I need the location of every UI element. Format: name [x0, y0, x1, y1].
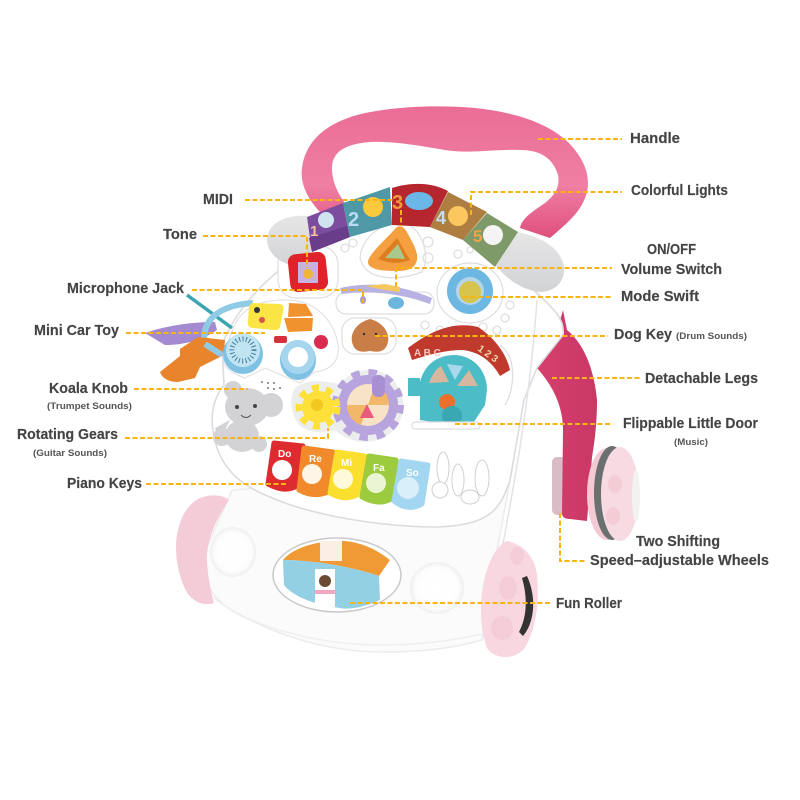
ABC 123 sign — [408, 325, 510, 376]
leader: colorful lights — [471, 192, 622, 215]
rear wheel inner rim — [552, 457, 566, 515]
orange key — [160, 337, 225, 382]
light 4: 4 — [436, 208, 446, 228]
leader: on/off — [396, 268, 612, 287]
light 2: 2 — [348, 209, 359, 231]
label: Mini Car Toy: Mini Car Toy — [34, 323, 119, 339]
leader: MIDI drop — [400, 210, 402, 226]
ABC 123 sign: 1 2 3 — [475, 343, 500, 365]
light 5: 5 — [473, 227, 482, 246]
yellow face — [248, 303, 284, 330]
dog key — [342, 318, 396, 354]
note: Drum Sounds: (Drum Sounds) — [676, 331, 747, 342]
leader: handle — [538, 138, 622, 140]
left front wheel — [176, 495, 229, 604]
key Do: Do — [278, 449, 291, 460]
label: Volume Switch: Volume Switch — [621, 262, 722, 278]
light 1: 1 — [310, 223, 318, 240]
teal stick — [187, 295, 232, 328]
tone button — [287, 251, 329, 293]
right grey handle end — [496, 232, 564, 292]
leader: detachable legs — [552, 377, 640, 379]
leader: MIDI — [245, 199, 395, 201]
housing: notes — [341, 237, 514, 405]
label: Piano Keys: Piano Keys — [67, 476, 142, 492]
base — [204, 470, 512, 652]
right front wheel — [481, 541, 538, 657]
key Do — [268, 443, 303, 489]
lavender key — [145, 322, 217, 345]
label: MIDI: MIDI — [203, 192, 233, 208]
leader: piano keys — [146, 483, 287, 485]
flippable little door — [408, 355, 487, 429]
rabbits decoration — [432, 452, 489, 504]
orange buttons — [288, 303, 313, 317]
handle — [302, 106, 588, 238]
light 5 — [463, 213, 518, 267]
base lower rim — [213, 597, 482, 645]
label: Rotating Gears: Rotating Gears — [17, 427, 118, 443]
leader: rotating gears — [125, 428, 328, 438]
gear well — [291, 370, 403, 442]
detachable leg — [537, 310, 597, 521]
label: Handle: Handle — [630, 131, 680, 147]
yellow gear — [299, 388, 337, 426]
label: Microphone Jack: Microphone Jack — [67, 281, 185, 297]
key Re — [299, 448, 333, 495]
light 3 — [392, 184, 448, 227]
leader: flippable door — [455, 423, 613, 425]
blue ring stub — [205, 344, 222, 355]
walker body — [204, 220, 563, 652]
wheel ring — [280, 340, 316, 380]
label: Fun Roller: Fun Roller — [556, 596, 622, 612]
light 2 — [343, 187, 392, 237]
light 3: 3 — [392, 192, 403, 214]
key Mi: Mi — [341, 458, 352, 469]
label: Mode Swift: Mode Swift — [621, 289, 699, 305]
car body — [223, 300, 338, 383]
piano keys — [268, 443, 428, 507]
note: Music: (Music) — [674, 437, 708, 448]
mode switch dial — [447, 268, 493, 314]
ABC 123 sign: A B C — [414, 348, 441, 359]
note: Trumpet Sounds: (Trumpet Sounds) — [47, 401, 132, 412]
key Fa: Fa — [373, 463, 385, 474]
leader: mode swift — [463, 296, 612, 298]
label: ON/OFF: ON/OFF — [647, 242, 696, 258]
label: Dog Key: Dog Key — [614, 327, 672, 343]
key So: So — [406, 468, 419, 479]
orange triangle switch — [368, 226, 417, 271]
mini car toy — [145, 295, 338, 383]
leader: koala knob — [134, 388, 248, 390]
left grey handle end — [267, 216, 312, 266]
label: Colorful Lights: Colorful Lights — [631, 183, 728, 199]
key Fa — [362, 456, 396, 502]
leader: fun roller — [350, 602, 550, 604]
housing: triangle — [360, 222, 426, 278]
key So — [394, 461, 428, 507]
rear wheel — [587, 446, 640, 541]
small red button — [274, 336, 287, 343]
housing: tone — [278, 246, 338, 298]
label: Two Shifting: Two Shifting — [636, 534, 720, 550]
speaker — [223, 333, 263, 374]
play tray — [212, 220, 563, 527]
blue ring — [204, 303, 253, 345]
note: Guitar Sounds: (Guitar Sounds) — [33, 448, 107, 459]
purple gear — [335, 372, 401, 438]
label: Koala Knob: Koala Knob — [49, 381, 128, 397]
speaker holes — [261, 381, 281, 390]
leader: mini car toy — [126, 332, 265, 334]
housing: dial — [437, 263, 503, 323]
light 1 — [307, 203, 350, 252]
key Re: Re — [309, 454, 322, 465]
leader: dog key — [375, 335, 608, 337]
key Mi — [330, 452, 365, 498]
microphone jack strip — [336, 284, 434, 314]
label: Detachable Legs: Detachable Legs — [645, 371, 758, 387]
light 4 — [430, 192, 487, 240]
label: Speed-adjustable Wheels: Speed–adjustable Wheels — [590, 553, 769, 569]
leader: wheels — [560, 513, 585, 561]
rear leg and wheel — [537, 310, 640, 541]
leader: tone — [203, 236, 307, 268]
leader: microphone jack — [192, 290, 363, 303]
label: Flippable Little Door: Flippable Little Door — [623, 416, 758, 432]
side edge — [500, 300, 537, 560]
base hollows — [210, 527, 256, 577]
koala knob — [213, 381, 283, 452]
red dot — [314, 335, 328, 349]
rotating gears — [291, 370, 403, 442]
label: Tone: Tone — [163, 227, 197, 243]
colorful lights — [307, 184, 518, 267]
fun roller — [273, 538, 401, 612]
